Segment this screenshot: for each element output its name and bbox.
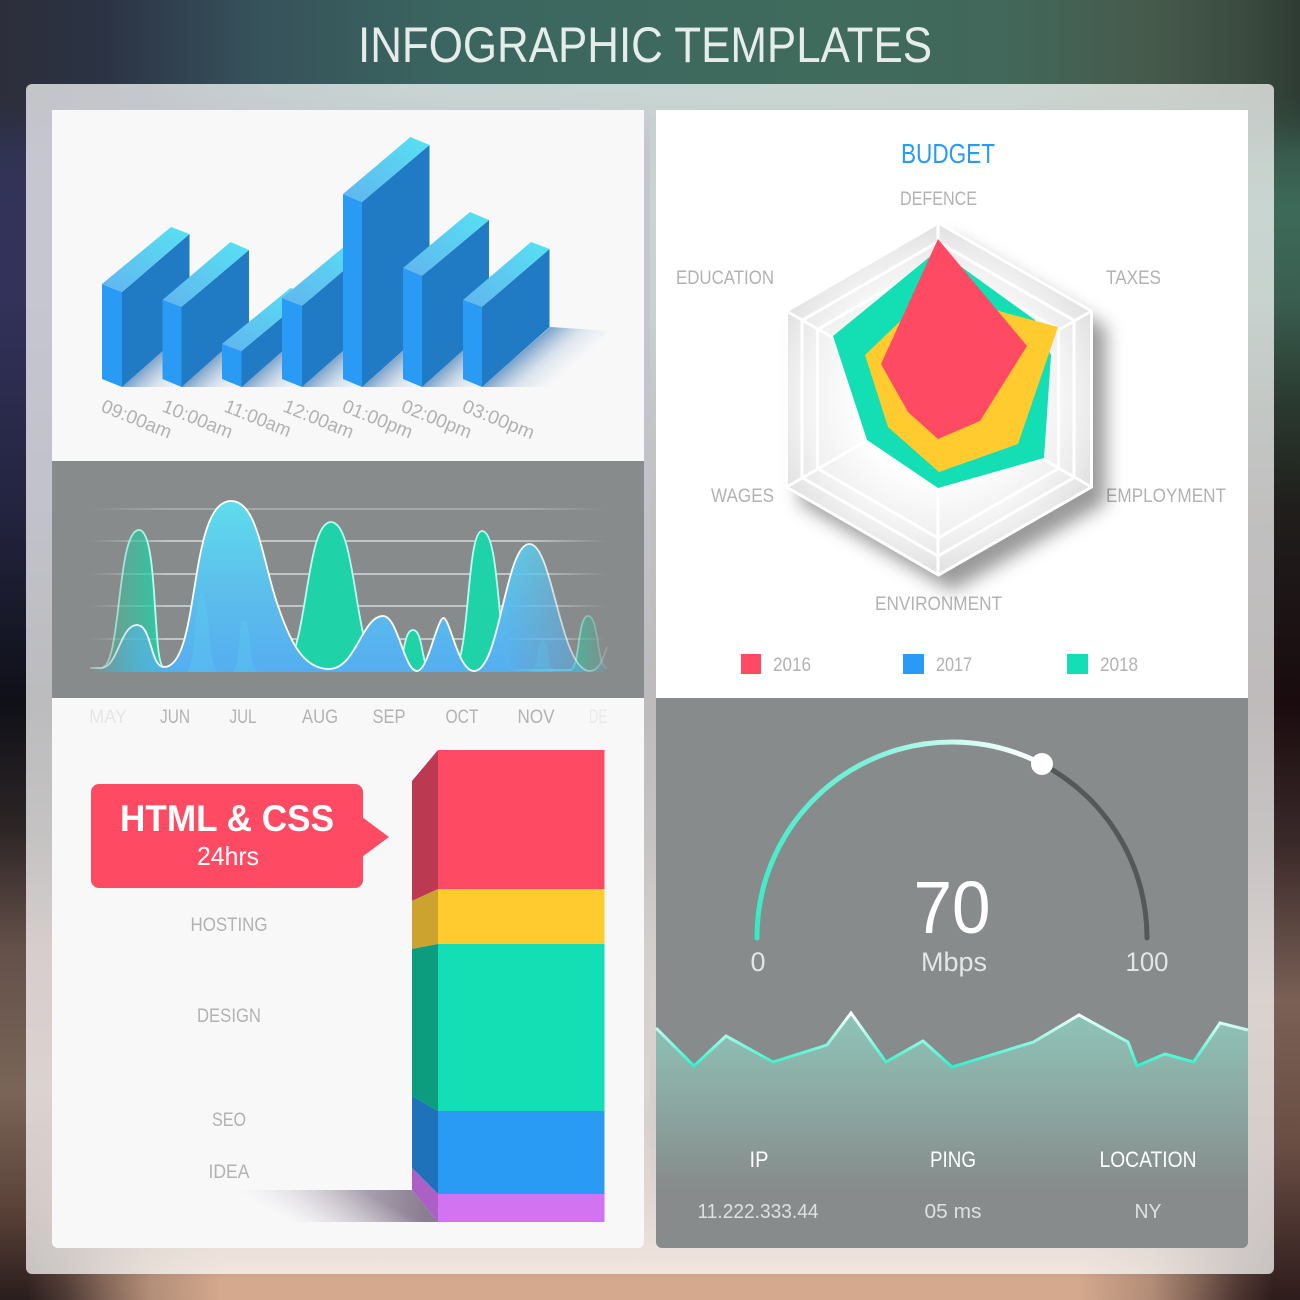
radar axis labels: TAXES <box>1106 268 1161 289</box>
callout: HTML & CSS: 24hrs <box>197 841 259 871</box>
gauge arc <box>757 742 1147 938</box>
connection details: LOCATION <box>1100 1147 1196 1172</box>
bar: 02:00pm <box>403 212 489 387</box>
month axis labels: OCT <box>446 707 479 728</box>
radar axis labels: ENVIRONMENT <box>875 594 1002 615</box>
radar grid <box>786 223 1106 591</box>
legend <box>741 654 1138 676</box>
shadow under stack <box>263 1190 438 1222</box>
legend: 2016 <box>773 655 811 676</box>
panel: isometric bar chart <box>52 110 644 461</box>
month axis labels: SEP <box>372 707 406 728</box>
legend: 2018 <box>1100 655 1138 676</box>
bar time labels: 01:00pm <box>339 396 416 443</box>
bar time labels: 02:00pm <box>398 396 475 443</box>
gauge value <box>750 866 1168 977</box>
green area series <box>90 522 607 672</box>
month axis labels: NOV <box>518 707 555 728</box>
radar axis labels: WAGES <box>711 486 774 507</box>
panel: budget radar <box>656 110 1248 698</box>
stack labels <box>190 915 268 1183</box>
bar time labels <box>98 396 537 444</box>
bar: 03:00pm <box>463 242 550 387</box>
radar axis labels: EMPLOYMENT <box>1106 486 1226 507</box>
panel: monthly area chart <box>52 461 644 698</box>
gauge value: 100 <box>1126 947 1168 977</box>
bar: 11:00am <box>222 288 310 387</box>
callout: HTML & CSS: HTML & CSS <box>120 798 334 839</box>
gauge value: 0 <box>750 947 766 977</box>
month axis labels: MAY <box>89 707 127 728</box>
bar time labels: 12:00am <box>280 396 357 443</box>
legend: 2017 <box>936 655 972 676</box>
bar time labels: 03:00pm <box>459 396 537 444</box>
connection details <box>698 1147 1196 1223</box>
stack labels: SEO <box>212 1110 246 1131</box>
connection details: 05 ms <box>924 1201 982 1223</box>
panel: speed gauge <box>656 698 1248 1248</box>
month axis labels: DE <box>589 707 607 728</box>
stack labels: DESIGN <box>197 1006 261 1027</box>
month axis labels <box>89 707 607 728</box>
radar axis labels: EDUCATION <box>676 268 774 289</box>
connection details: PING <box>930 1147 976 1172</box>
bar time labels: 11:00am <box>221 396 294 442</box>
bar: 10:00am <box>162 242 249 387</box>
stack labels: HOSTING <box>190 915 268 936</box>
bar: 01:00pm <box>343 137 430 387</box>
panel: stacked column <box>52 698 644 1248</box>
connection details: IP <box>750 1147 768 1172</box>
blue area series <box>90 501 607 672</box>
radar series: 2017 <box>865 285 1058 472</box>
month axis labels: JUL <box>230 707 256 728</box>
connection details: 11.222.333.44 <box>698 1201 818 1223</box>
bar time labels: 10:00am <box>159 396 236 443</box>
callout: HTML & CSS <box>91 784 389 888</box>
month axis labels: AUG <box>302 707 338 728</box>
heading: budget: BUDGET <box>901 138 995 169</box>
radar axis labels: DEFENCE <box>900 189 977 210</box>
bar: 09:00am <box>102 227 190 387</box>
radar series: 2016 <box>881 239 1027 439</box>
title: INFOGRAPHIC TEMPLATES <box>358 17 932 73</box>
stack labels: IDEA <box>208 1162 250 1183</box>
bar: 12:00am <box>282 241 370 387</box>
mini area chart <box>656 1013 1248 1190</box>
bar time labels: 09:00am <box>98 396 175 443</box>
stacked 3D column <box>412 750 604 1222</box>
connection details: NY <box>1134 1201 1162 1223</box>
radar axis labels <box>676 189 1226 615</box>
gauge value: 70 <box>914 866 990 949</box>
radar series: 2018 <box>833 250 1051 488</box>
gauge value: Mbps <box>921 947 987 977</box>
month axis labels: JUN <box>160 707 190 728</box>
